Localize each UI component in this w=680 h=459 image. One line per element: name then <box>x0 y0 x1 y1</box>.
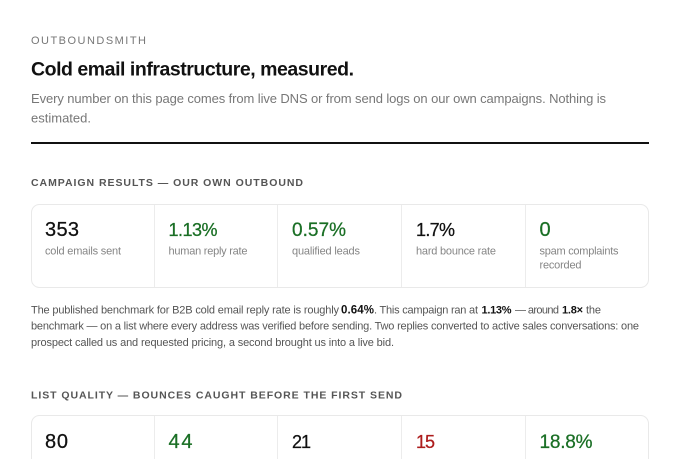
paragraph: benchmark comparison: The published benchmark for B2B cold email reply rate is roughly <box>31 304 340 316</box>
stat: 80: 80 <box>45 431 68 453</box>
stat: spam complaints recorded: 0 <box>540 219 551 241</box>
stat: 21: 21 <box>292 432 311 452</box>
stat: hard bounce rate: 1.7% <box>416 220 455 240</box>
stat: human reply rate <box>168 220 248 258</box>
stat: human reply rate: human reply rate <box>168 246 248 258</box>
paragraph: benchmark comparison: prospect called us and requested pricing, a second brought us into a live bid. <box>31 337 394 349</box>
stat: cold emails sent <box>45 219 121 258</box>
paragraph: benchmark comparison: the <box>586 304 601 316</box>
intro text: Every number on this page comes from live DNS or from send logs on our own campaigns. Nothing is <box>31 91 606 106</box>
stat: cold emails sent: 353 <box>45 219 79 241</box>
paragraph: benchmark comparison: 1.13% <box>482 304 512 316</box>
title: Cold email infrastructure, measured. <box>31 58 354 80</box>
intro text: estimated. <box>31 110 91 126</box>
paragraph: benchmark comparison: 1.8× <box>562 304 583 316</box>
stat: 44: 44 <box>168 431 192 453</box>
stat: cold emails sent: cold emails sent <box>45 246 121 258</box>
stat: 15: 15 <box>416 432 435 452</box>
section heading: list quality: LIST QUALITY — BOUNCES CAUGHT BEFORE THE FIRST SEND <box>31 390 402 402</box>
stat: human reply rate: 1.13% <box>168 220 218 240</box>
section heading: campaign results: CAMPAIGN RESULTS — OUR OWN OUTBOUND <box>31 177 303 189</box>
stat: qualified leads: 0.57% <box>292 220 346 241</box>
panel: campaign results stats <box>32 204 648 288</box>
intro text <box>31 91 606 126</box>
paragraph: benchmark comparison: 0.64% <box>341 304 374 316</box>
stat: spam complaints recorded <box>540 219 619 272</box>
stat: 18.8%: 18.8% <box>540 432 593 453</box>
panel: list quality stats <box>32 416 648 459</box>
stat: hard bounce rate: hard bounce rate <box>416 246 496 258</box>
eyebrow: brand name: OUTBOUNDSMITH <box>31 35 146 47</box>
paragraph: benchmark comparison: — around <box>515 304 559 316</box>
stat: qualified leads <box>292 220 360 258</box>
stat: hard bounce rate <box>416 220 496 258</box>
stat: spam complaints recorded: recorded <box>540 260 582 272</box>
stat: spam complaints recorded: spam complaints <box>540 246 619 258</box>
paragraph: benchmark comparison <box>31 304 639 349</box>
paragraph: benchmark comparison: benchmark — on a list where every address was verified before sending. Two replies converted to active sales conversations: one <box>31 320 639 332</box>
stat: qualified leads: qualified leads <box>292 246 360 258</box>
paragraph: benchmark comparison: . This campaign ran at <box>374 304 478 316</box>
